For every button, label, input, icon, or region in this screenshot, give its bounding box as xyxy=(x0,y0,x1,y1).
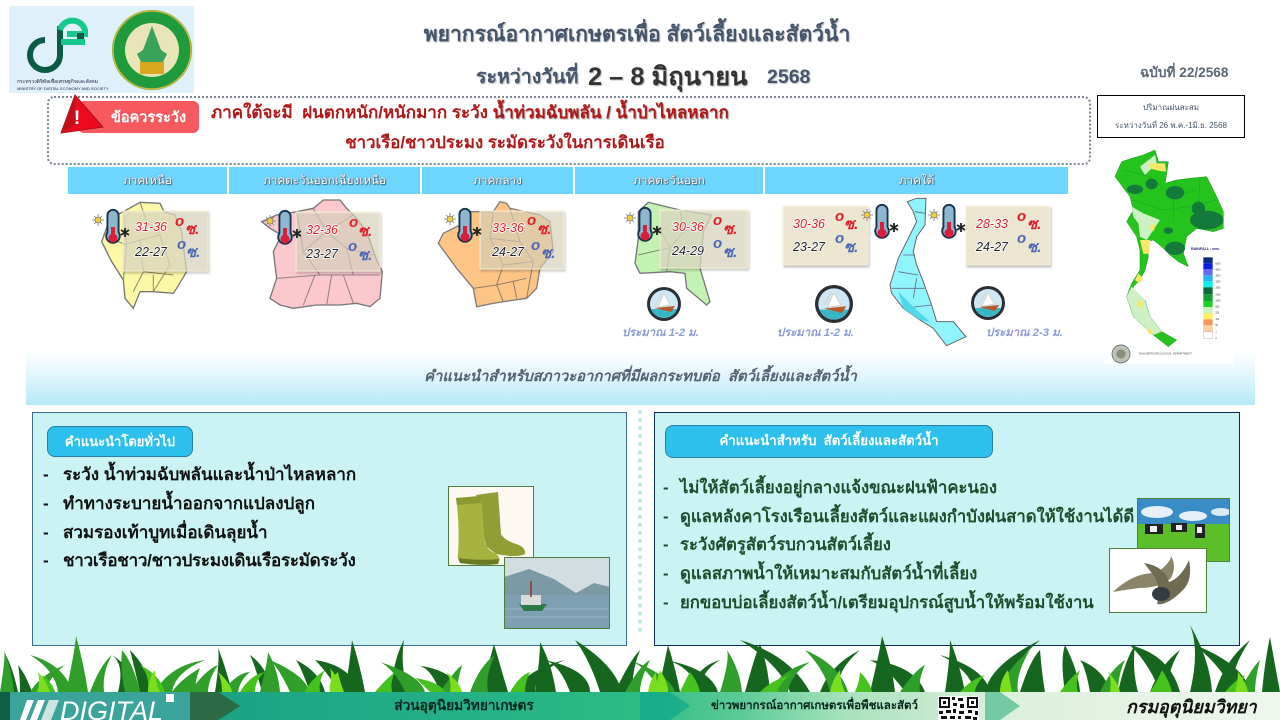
photo: fishing boat xyxy=(504,557,610,629)
temperature: central: o xyxy=(531,237,540,254)
general advice list: ระวัง น้ำท่วมฉับพลันและน้ำป่าไหลหลาก xyxy=(63,465,356,484)
map: east xyxy=(635,202,712,305)
grass xyxy=(0,625,1280,692)
icon: ship east xyxy=(647,287,681,321)
temperature: south west: 30-36 xyxy=(793,217,825,231)
temperature: northeast: o xyxy=(349,214,358,231)
temperature: east xyxy=(624,208,748,268)
livestock advice list: ยกขอบบ่อเลี้ยงสัตว์น้ำ/เตรียมอุปกรณ์สูบน้ำให้พร้อมใช้งาน xyxy=(680,593,1094,612)
warning badge xyxy=(78,101,199,133)
temperature: east: o xyxy=(713,235,722,252)
temperature: central: ซ. xyxy=(537,221,551,238)
temperature: south west xyxy=(783,205,898,265)
temperature: northeast xyxy=(264,211,380,271)
general advice list xyxy=(43,462,356,570)
date range: ระหว่างวันที่ xyxy=(476,66,578,88)
general advice list: - xyxy=(43,465,49,484)
heading: general advice xyxy=(47,426,193,457)
region header: northeast xyxy=(229,167,420,194)
digital logo xyxy=(20,694,174,720)
temperature: north: 31-36 xyxy=(135,220,167,234)
general advice list: สวมรองเท้าบูทเมื่อเดินลุยน้ำ xyxy=(63,523,268,542)
icon: warning triangle xyxy=(60,94,104,134)
temperature: central: ซ. xyxy=(541,245,555,262)
heading: livestock advice xyxy=(665,425,993,458)
divider xyxy=(638,410,642,632)
temperature: north: ซ. xyxy=(185,221,199,238)
legend: 100 xyxy=(1215,319,1220,321)
temperature: south east: 28-33 xyxy=(975,217,1008,231)
temperature: northeast: 23-27 xyxy=(305,247,339,261)
temperature: south west: o xyxy=(835,230,844,247)
temperature: south east xyxy=(928,205,1050,265)
warning line 2: ชาวเรือ/ชาวประมง ระมัดระวังในการเดินเรือ xyxy=(345,133,665,152)
legend title: RAINFALL : mm. xyxy=(1191,247,1220,251)
wave height: south west: ประมาณ 1-2 ม. xyxy=(777,327,854,339)
seal xyxy=(1112,345,1130,363)
panel: warning xyxy=(47,96,1091,165)
legend: 4000 xyxy=(1215,270,1221,272)
map: northeast xyxy=(262,200,382,308)
legend: 500 xyxy=(1215,307,1220,309)
icon: ship south east xyxy=(971,286,1005,320)
temperature: central: 24-27 xyxy=(491,245,525,259)
panel: livestock and aquatic advice xyxy=(654,412,1240,646)
temperature: east: ซ. xyxy=(723,221,737,238)
QR code xyxy=(938,696,979,720)
warning line 1: ภาคใต้จะมี ฝนตกหนัก/หนักมาก ระวัง น้ำท่วมฉับพลัน / น้ำป่าไหลหลาก xyxy=(211,103,729,122)
panel: general advice xyxy=(32,412,627,646)
temperature: north xyxy=(92,210,208,271)
general advice list: - xyxy=(43,551,49,570)
region header: south: ภาคใต้ xyxy=(899,174,934,187)
date range xyxy=(476,62,811,94)
temperature: south west: o xyxy=(835,208,844,225)
temperature: northeast: o xyxy=(348,238,357,255)
wave height: east: ประมาณ 1-2 ม. xyxy=(622,327,699,339)
temperature: south east: 24-27 xyxy=(975,240,1009,254)
temperature: south east: ซ. xyxy=(1027,239,1041,256)
livestock advice list: ดูแลหลังคาโรงเรือนเลี้ยงสัตว์และแผงกำบังฝนสาดให้ใช้งานได้ดี xyxy=(680,507,1134,526)
icon: ship south west xyxy=(815,285,853,323)
legend: 3000 xyxy=(1215,276,1221,278)
livestock advice list: - xyxy=(663,478,669,497)
livestock advice list xyxy=(663,475,1134,613)
wave height: south east: ประมาณ 2-3 ม. xyxy=(986,327,1063,339)
temperature: east: 30-36 xyxy=(672,220,704,234)
temperature: south west: ซ. xyxy=(844,216,858,233)
temperature: central xyxy=(444,209,564,269)
legend: 1000 xyxy=(1215,301,1221,303)
legend: 1500 xyxy=(1215,294,1221,296)
region header: east: ภาคตะวันออก xyxy=(633,174,705,187)
rainfall period box: ระหว่างวันที่ 26 พ.ค.-1มิ.ย. 2568 xyxy=(1115,121,1227,130)
legend: 0 xyxy=(1215,338,1217,340)
rain band xyxy=(26,351,1255,405)
region header: north xyxy=(68,167,227,194)
legend: 2000 xyxy=(1215,288,1221,290)
heading: advice band: คำแนะนำสำหรับสภาวะอากาศที่มีผลกระทบต่อ สัตว์เลี้ยงและสัตว์น้ำ xyxy=(424,369,857,385)
general advice list: - xyxy=(43,494,49,513)
legend: 1 xyxy=(1215,331,1217,333)
map: north xyxy=(102,202,187,308)
general advice list: ทำทางระบายน้ำออกจากแปลงปลูก xyxy=(63,494,315,513)
icon: meteorological department seal xyxy=(112,10,192,90)
footer xyxy=(0,692,1280,720)
rainfall period box xyxy=(1097,95,1245,138)
photo: catfish xyxy=(1109,548,1207,613)
heading: livestock advice: คำแนะนำสำหรับ สัตว์เลี้ยงและสัตว์น้ำ xyxy=(719,433,939,448)
region header: northeast: ภาคตะวันออกเฉียงเหนือ xyxy=(263,174,386,187)
icon: warning triangle: ! xyxy=(74,108,80,129)
title: พยากรณ์อากาศเกษตรเพื่อ สัตว์เลี้ยงและสัตว์น้ำ xyxy=(424,23,850,46)
region header: central xyxy=(422,167,573,194)
footer chevrons xyxy=(0,692,1020,720)
livestock advice list: - xyxy=(663,564,669,583)
temperature: east: 24-29 xyxy=(671,244,704,258)
footer: department: กรมอุตุนิยมวิทยา xyxy=(1126,697,1257,717)
temperature: south east: o xyxy=(1017,230,1026,247)
temperature: south east: ซ. xyxy=(1027,216,1041,233)
region header: south xyxy=(765,167,1068,194)
map: south xyxy=(890,198,966,346)
region maps and temperatures xyxy=(92,198,1063,346)
general advice list: ชาวเรือชาว/ชาวประมงเดินเรือระมัดระวัง xyxy=(63,551,356,570)
temperature: south west: ซ. xyxy=(844,239,858,256)
temperature: east: o xyxy=(713,212,722,229)
footer: bulletin: ข่าวพยากรณ์อากาศเกษตรเพื่อพืชและสัตว์ xyxy=(711,700,918,712)
legend: 250 xyxy=(1215,313,1220,315)
footer: division: ส่วนอุตุนิยมวิทยาเกษตร xyxy=(394,698,534,713)
legend xyxy=(1203,257,1221,340)
issue number: ฉบับที่ 22/2568 xyxy=(1140,65,1228,80)
region header: north: ภาคเหนือ xyxy=(123,174,172,187)
text: 2 – 8 มิถุนายน xyxy=(588,63,748,91)
livestock advice list: ไม่ให้สัตว์เลี้ยงอยู่กลางแจ้งขณะฝนฟ้าคะนอง xyxy=(680,478,997,497)
general advice list: - xyxy=(43,523,49,542)
temperature: north: ซ. xyxy=(186,244,200,261)
chart: rainfall map xyxy=(1105,150,1234,364)
temperature: northeast: ซ. xyxy=(358,223,372,240)
map: central xyxy=(438,202,553,307)
temperature: south east: o xyxy=(1017,208,1026,225)
icon: ministry logo: MINISTRY OF DIGITAL ECONOMY AND SOCIETY xyxy=(17,86,109,91)
region header: east xyxy=(575,167,763,194)
icon: rubber boots xyxy=(448,486,534,566)
temperature: east: ซ. xyxy=(723,244,737,261)
icon: ministry logo xyxy=(17,21,109,91)
temperature: central: 33-36 xyxy=(492,221,524,235)
livestock advice list: ระวังศัตรูสัตว์รบกวนสัตว์เลี้ยง xyxy=(680,535,891,554)
livestock advice list: - xyxy=(663,507,669,526)
legend: 6000 xyxy=(1215,264,1221,266)
temperature: north: o xyxy=(177,236,186,253)
rainfall period box: ปริมาณฝนสะสม xyxy=(1143,103,1199,112)
temperature: north: 22-27 xyxy=(134,245,168,259)
photo: cows in field xyxy=(1137,498,1230,562)
icon: ministry logo: กระทรวงดิจิทัลเพื่อเศรษฐกิจและสังคม xyxy=(17,78,98,85)
heading: general advice: คำแนะนำโดยทั่วไป xyxy=(65,434,175,449)
logos xyxy=(9,6,194,93)
temperature: northeast: ซ. xyxy=(358,247,372,264)
livestock advice list: - xyxy=(663,535,669,554)
legend: 50 xyxy=(1215,325,1219,327)
livestock advice list: ดูแลสภาพน้ำให้เหมาะสมกับสัตว์น้ำที่เลี้ยง xyxy=(680,564,977,583)
temperature: central: o xyxy=(527,212,536,229)
livestock advice list: - xyxy=(663,593,669,612)
temperature: north: o xyxy=(175,213,184,230)
department label: THAI METEOROLOGICAL DEPARTMENT xyxy=(1138,351,1192,355)
region header: central: ภาคกลาง xyxy=(473,174,522,187)
temperature: south west: 23-27 xyxy=(792,240,826,254)
legend: 2500 xyxy=(1215,282,1221,284)
warning badge: ข้อควรระวัง xyxy=(111,110,186,126)
temperature: northeast: 32-36 xyxy=(306,223,338,237)
text: 2568 xyxy=(767,66,810,88)
